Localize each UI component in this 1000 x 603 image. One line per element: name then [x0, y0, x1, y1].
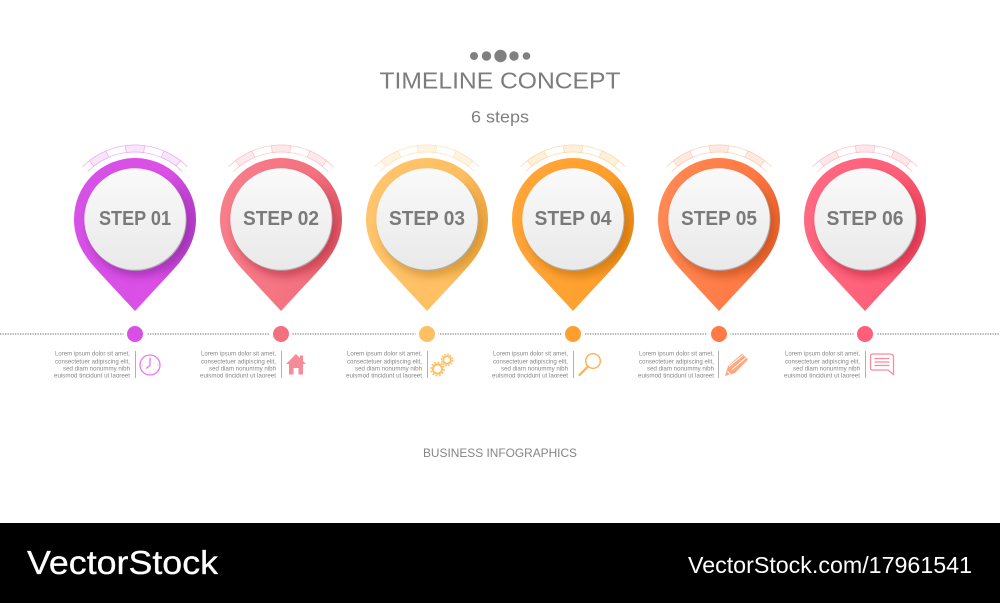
divider 4: [572, 351, 574, 378]
brand name: VectorStock: [27, 545, 218, 582]
text block 3: sed diam nonummy nibh: [355, 366, 422, 372]
disc: [814, 168, 917, 271]
pin shadow: [88, 175, 190, 277]
icon: gears: [431, 354, 453, 376]
text block 6: sed diam nonummy nibh: [793, 366, 860, 372]
icon: clock: [140, 355, 160, 375]
text block 5: consectetuer adipiscing elit,: [639, 360, 714, 366]
pin shadow: [526, 175, 628, 277]
text block 6: Lorem ipsum dolor sit amet,: [785, 352, 860, 358]
text block 4: euismod tincidunt ut laoreet: [492, 374, 568, 380]
pin body: [658, 158, 780, 311]
step label: STEP 06: [826, 208, 904, 230]
text block 1: consectetuer adipiscing elit,: [55, 360, 130, 366]
arc decoration: [83, 145, 187, 172]
divider 2: [280, 351, 282, 378]
text block 1: euismod tincidunt ut laoreet: [54, 374, 130, 380]
pin 1: [74, 145, 196, 311]
icon: house: [286, 354, 306, 374]
text block 6: euismod tincidunt ut laoreet: [784, 374, 860, 380]
text block 3: consectetuer adipiscing elit,: [347, 360, 422, 366]
timeline: [0, 322, 1000, 346]
marker 1: [127, 326, 143, 342]
disc: [376, 168, 479, 271]
step label: STEP 05: [681, 208, 757, 230]
pin 6: [804, 145, 926, 311]
text block 2: consectetuer adipiscing elit,: [201, 360, 276, 366]
divider 3: [426, 351, 428, 378]
text block 3: Lorem ipsum dolor sit amet,: [347, 352, 422, 358]
arc decoration: [521, 145, 625, 172]
pin 2: [220, 145, 342, 311]
header dots: [470, 50, 530, 62]
text block 5: euismod tincidunt ut laoreet: [638, 374, 714, 380]
marker 2: [273, 326, 289, 342]
text block 1: Lorem ipsum dolor sit amet,: [55, 352, 130, 358]
marker 5: [711, 326, 727, 342]
text block 4: Lorem ipsum dolor sit amet,: [493, 352, 568, 358]
pin body: [74, 158, 196, 311]
arc decoration: [375, 145, 479, 172]
text block 1: [54, 352, 130, 380]
disc: [230, 168, 333, 271]
disc: [522, 168, 625, 271]
text block 4: sed diam nonummy nibh: [501, 366, 568, 372]
pin body: [220, 158, 342, 311]
step label: STEP 04: [534, 208, 612, 230]
icon: magnifier: [580, 354, 600, 375]
pin shadow: [672, 175, 774, 277]
marker 4: [565, 326, 581, 342]
text block 6: [784, 352, 860, 380]
text block 2: [200, 352, 276, 380]
pin shadow: [380, 175, 482, 277]
divider 5: [718, 351, 720, 378]
step label: STEP 02: [243, 208, 319, 230]
disc: [668, 168, 771, 271]
arc decoration: [813, 145, 917, 172]
step label: STEP 01: [99, 208, 171, 230]
text block 5: sed diam nonummy nibh: [647, 366, 714, 372]
arc decoration: [667, 145, 771, 172]
footer caption: BUSINESS INFOGRAPHICS: [423, 446, 577, 460]
marker 3: [419, 326, 435, 342]
subtitle: 6 steps: [471, 108, 529, 126]
pin shadow: [818, 175, 920, 277]
divider 1: [134, 351, 136, 378]
text block 2: Lorem ipsum dolor sit amet,: [201, 352, 276, 358]
icon: speech bubble: [870, 354, 894, 374]
text block 1: sed diam nonummy nibh: [63, 366, 130, 372]
pin 3: [366, 145, 488, 311]
pin shadow: [234, 175, 336, 277]
text block 2: euismod tincidunt ut laoreet: [200, 374, 276, 380]
text block 3: [346, 352, 422, 380]
text block 5: [638, 352, 714, 380]
pin 5: [658, 145, 780, 311]
marker 6: [857, 326, 873, 342]
image url: VectorStock.com/17961541: [688, 552, 972, 578]
arc decoration: [229, 145, 333, 172]
text block 2: sed diam nonummy nibh: [209, 366, 276, 372]
divider 6: [864, 351, 866, 378]
watermark band: [0, 523, 1000, 603]
pin body: [512, 158, 634, 311]
title: TIMELINE CONCEPT: [380, 68, 620, 94]
text block 3: euismod tincidunt ut laoreet: [346, 374, 422, 380]
text block 4: consectetuer adipiscing elit,: [493, 360, 568, 366]
text block 4: [492, 352, 568, 380]
text block 6: consectetuer adipiscing elit,: [785, 360, 860, 366]
pin 4: [512, 145, 634, 311]
disc: [84, 168, 187, 271]
pin body: [804, 158, 926, 311]
step label: STEP 03: [389, 208, 465, 230]
icon: pencil: [725, 354, 748, 376]
text block 5: Lorem ipsum dolor sit amet,: [639, 352, 714, 358]
pin body: [366, 158, 488, 311]
